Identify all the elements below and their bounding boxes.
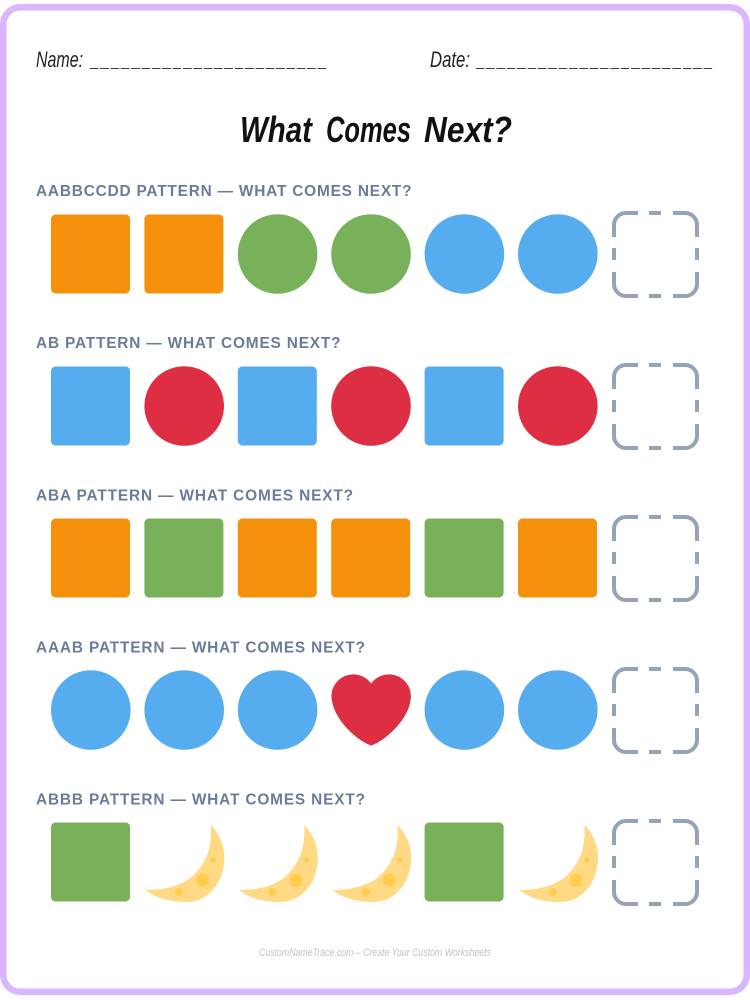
title bbox=[240, 109, 512, 150]
name field: _______________________ bbox=[89, 53, 327, 70]
title: Comes bbox=[326, 109, 411, 150]
row 4 answer box bbox=[614, 669, 697, 752]
row 3 heading: ABA PATTERN — WHAT COMES NEXT? bbox=[36, 488, 353, 504]
name field bbox=[36, 47, 327, 72]
row 5 answer box bbox=[614, 821, 697, 904]
title: Next? bbox=[424, 109, 512, 150]
row 5 shapes bbox=[51, 822, 598, 902]
date field: _______________________ bbox=[475, 53, 713, 70]
date field bbox=[430, 47, 713, 72]
title: What bbox=[240, 109, 314, 150]
row 4: AAAB pattern bbox=[36, 640, 697, 752]
footer: CustomNameTrace.com – Create Your Custom Worksheets bbox=[259, 947, 491, 959]
row 5 heading: ABBB PATTERN — WHAT COMES NEXT? bbox=[36, 792, 365, 808]
row 2 answer box bbox=[614, 365, 697, 448]
row 1 answer box bbox=[614, 213, 697, 296]
row 3 shapes bbox=[51, 518, 597, 598]
row 2: AB pattern bbox=[36, 335, 697, 448]
row 3: ABA pattern bbox=[36, 488, 697, 600]
row 3 answer box bbox=[614, 517, 697, 600]
row 4 heading: AAAB PATTERN — WHAT COMES NEXT? bbox=[36, 640, 365, 656]
row 2 heading: AB PATTERN — WHAT COMES NEXT? bbox=[36, 335, 340, 352]
row 1 heading: AABBCCDD PATTERN — WHAT COMES NEXT? bbox=[36, 183, 412, 200]
row 2 shapes bbox=[51, 366, 598, 446]
row 4 shapes bbox=[51, 670, 598, 750]
name field: Name: bbox=[36, 47, 83, 72]
row 1 shapes bbox=[51, 214, 598, 294]
row 5: ABBB pattern bbox=[36, 792, 697, 904]
row 1: AABBCCDD pattern bbox=[36, 183, 697, 296]
date field: Date: bbox=[430, 47, 470, 72]
